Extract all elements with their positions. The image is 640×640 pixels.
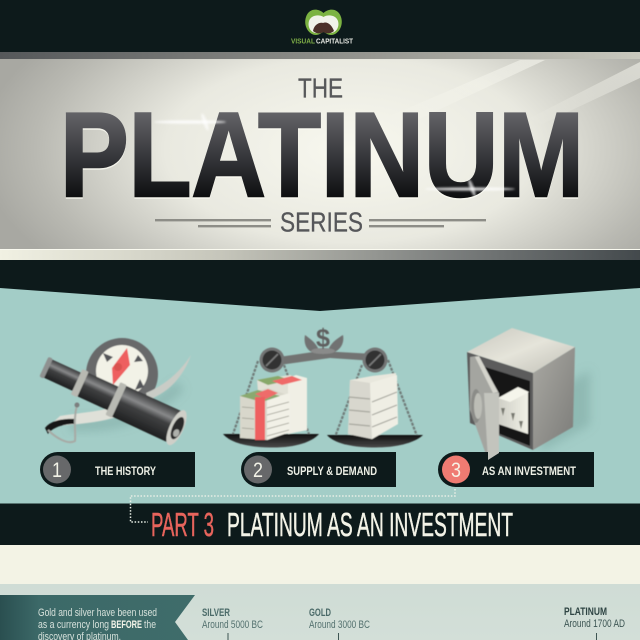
right pan (327, 435, 423, 448)
nav pill 2: Supply and Demand: 2 (253, 459, 263, 482)
chains (232, 360, 417, 437)
icon: open safe with bars (467, 328, 590, 460)
heading: SERIES: SERIES (280, 206, 363, 238)
section heading band: PART 3 (151, 506, 214, 543)
timeline label: gold (309, 607, 370, 640)
heading: THE: THE (298, 72, 343, 104)
beam (272, 351, 375, 366)
lens glints (154, 113, 515, 197)
ribbon callout (0, 595, 195, 640)
title banner (0, 52, 640, 260)
timeline label: gold: GOLD (309, 607, 331, 619)
chevron from header (0, 260, 640, 311)
logo: Visual Capitalist: CAPITALIST (316, 38, 354, 46)
timeline label: silver: SILVER (202, 607, 230, 619)
icon: telescope, compass and sword (36, 338, 191, 448)
compass (86, 338, 158, 410)
nav pill 2: Supply and Demand (241, 452, 396, 487)
lower timeline panel (0, 584, 640, 640)
ribbon callout: BEFORE (111, 619, 142, 631)
nav pill 1: The History: THE HISTORY (95, 466, 156, 478)
ribbon callout: Gold and silver have been used (38, 607, 157, 619)
timeline label: silver: Around 5000 BC (202, 619, 263, 631)
banknote stacks (240, 375, 307, 440)
logo: Visual Capitalist: VISUAL (291, 38, 316, 46)
platinum bar stack (348, 373, 398, 439)
bars (498, 387, 529, 434)
door (470, 356, 499, 460)
cream spacer (0, 545, 640, 584)
pivots (260, 348, 388, 372)
section heading band (0, 504, 640, 546)
dotted connector (130, 489, 455, 522)
dark header background (0, 0, 640, 310)
nav pill 1: The History: 1 (52, 459, 62, 482)
logo: Visual Capitalist (291, 10, 354, 45)
timeline label: platinum (564, 606, 625, 640)
nav pill 3: As an Investment: 3 (451, 459, 461, 482)
sword (45, 355, 191, 442)
timeline label: silver (202, 607, 263, 640)
ribbon callout: the (144, 619, 156, 631)
teal panel (0, 288, 640, 504)
left pan (223, 434, 319, 448)
timeline label: gold: Around 3000 BC (309, 619, 370, 631)
ribbon callout: as a currency long (38, 619, 109, 631)
nav pill 3: As an Investment: AS AN INVESTMENT (482, 466, 576, 478)
nav pill 3: As an Investment (438, 452, 594, 487)
icon: balance scale (223, 323, 423, 448)
nav pill 1: The History (40, 452, 195, 487)
timeline label: platinum: PLATINUM (564, 606, 607, 618)
dollar sign and wings (305, 323, 343, 354)
nav pill 2: Supply and Demand: SUPPLY & DEMAND (287, 466, 377, 478)
telescope (36, 349, 191, 448)
dollar sign and wings: $ (316, 323, 331, 353)
